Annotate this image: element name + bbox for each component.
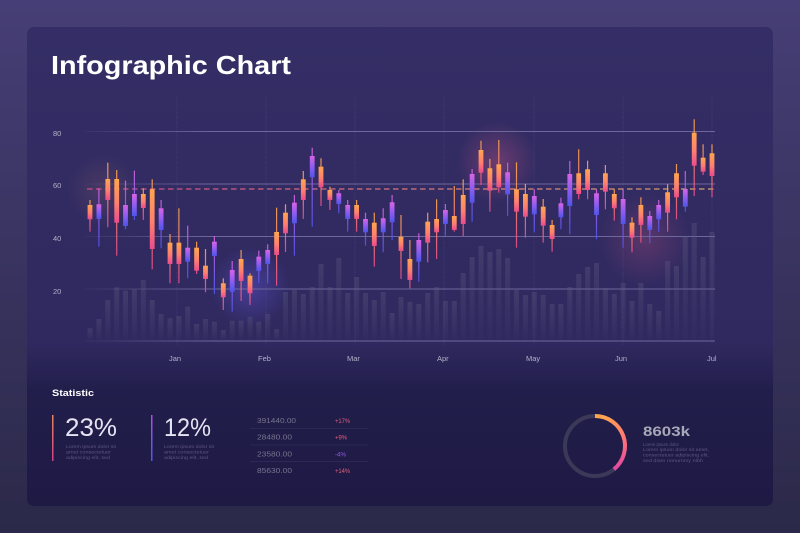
data table: -4% xyxy=(335,452,346,458)
stat block: 23% xyxy=(52,414,117,461)
x axis month labels: Mar xyxy=(347,354,360,363)
y axis labels: 40 xyxy=(53,234,61,243)
stat block: 23%: amet consectetuer xyxy=(66,450,111,456)
title: Infographic Chart xyxy=(51,50,291,80)
stat block: 12%: amet consectetuer xyxy=(164,450,209,456)
x axis month labels xyxy=(169,354,717,363)
x axis month labels: Jun xyxy=(615,354,627,363)
donut value and caption: Lorem ipsum dolor xyxy=(643,442,679,448)
x axis month labels: Feb xyxy=(258,354,271,363)
donut value and caption: consectetuer adipiscing elit, xyxy=(643,452,709,458)
volume bars xyxy=(88,223,714,340)
stat block: 23%: 23% xyxy=(65,414,117,442)
stat block: 12%: Lorem ipsum dolor sit xyxy=(164,444,215,450)
data table: 85630.00 xyxy=(257,466,292,475)
donut value and caption: sed diam nonummy nibh xyxy=(643,458,703,464)
y axis labels: 80 xyxy=(53,129,61,138)
chart glows xyxy=(67,122,691,327)
data table: 23580.00 xyxy=(257,450,292,458)
data table: +17% xyxy=(335,418,350,425)
donut value and caption: Lorem ipsum dolor sit amet, xyxy=(643,447,709,453)
data table: +9% xyxy=(335,434,347,442)
data table xyxy=(250,416,368,475)
stat block: 12%: 12% xyxy=(164,414,211,442)
statistic heading: Statistic xyxy=(52,388,94,399)
data table: +14% xyxy=(335,468,350,475)
x axis month labels: Jan xyxy=(169,354,181,363)
average dashed line xyxy=(87,188,715,190)
stat block: 12% xyxy=(151,414,215,461)
data table: 28480.00 xyxy=(257,432,292,442)
x axis month labels: May xyxy=(526,354,540,363)
y axis labels: 60 xyxy=(53,181,61,190)
stat block: 12%: adipiscing elit, sed xyxy=(164,455,208,461)
x axis month labels: Apr xyxy=(437,354,449,363)
data table: 391440.00 xyxy=(257,416,296,425)
y axis labels: 20 xyxy=(53,287,61,296)
gridlines xyxy=(85,97,715,345)
candlesticks xyxy=(88,119,714,312)
y axis labels xyxy=(53,129,61,296)
x axis month labels: Jul xyxy=(707,354,717,363)
donut value and caption xyxy=(643,423,709,464)
donut chart xyxy=(565,416,625,476)
donut value and caption: 8603k xyxy=(643,423,690,439)
stat block: 23%: adipiscing elit, sed xyxy=(66,455,110,461)
stat block: 23%: Lorem ipsum dolor sit xyxy=(66,444,117,450)
